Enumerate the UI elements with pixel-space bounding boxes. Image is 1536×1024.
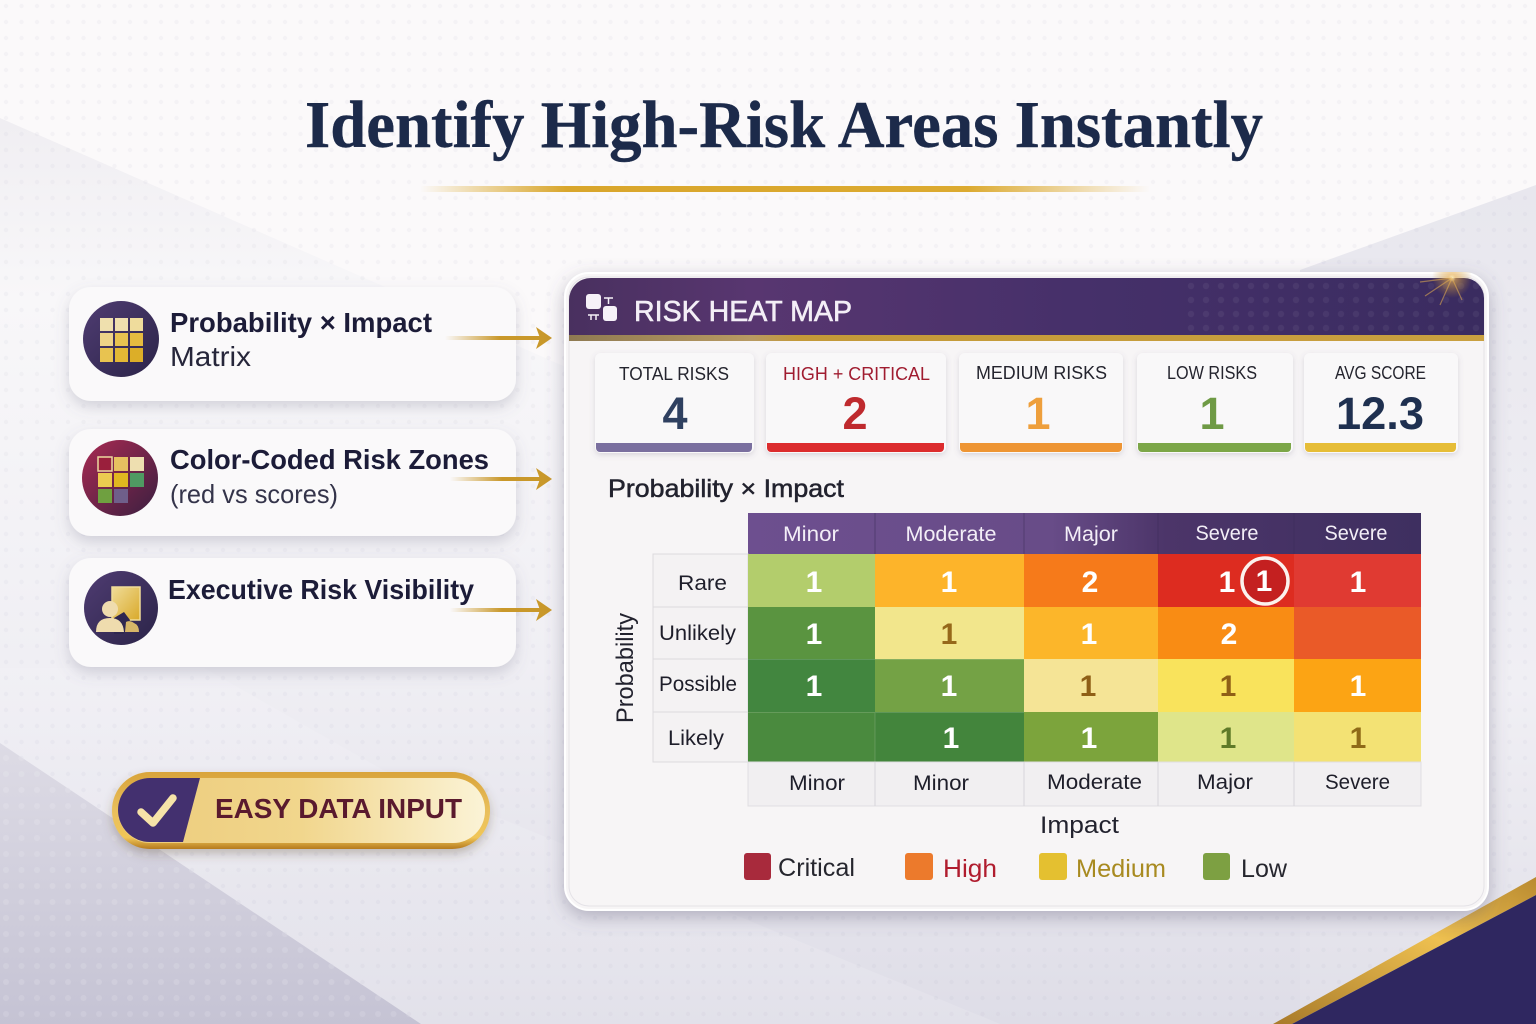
kpi: low risks: LOW RISKS bbox=[1167, 363, 1257, 383]
icon: check mark bbox=[118, 778, 200, 842]
kpi: high and critical: 2 bbox=[842, 388, 868, 439]
kpi: low risks bbox=[1137, 353, 1293, 453]
bottom axis labels: Minor bbox=[789, 772, 845, 795]
heading: executive risk visibility: Executive Risk Visibility bbox=[168, 574, 474, 605]
icon: executive with board bbox=[84, 571, 158, 645]
column headers bbox=[748, 513, 1421, 554]
column headers: Severe bbox=[1196, 522, 1258, 545]
column headers: Moderate bbox=[906, 523, 996, 546]
heat map cells: 1 bbox=[941, 566, 957, 599]
kpi: low risks: 1 bbox=[1199, 388, 1225, 439]
heat map cells: 2 bbox=[1082, 566, 1098, 599]
panel: probability impact matrix bbox=[69, 287, 516, 401]
panel: risk heat map bbox=[565, 258, 1488, 910]
heat map cells: 1 bbox=[1350, 722, 1366, 755]
icon: heat map glyph bbox=[586, 294, 617, 321]
bottom axis labels bbox=[748, 762, 1421, 806]
bottom axis labels: Major bbox=[1197, 771, 1253, 794]
heat map cells: 1 bbox=[1081, 722, 1097, 755]
row labels bbox=[653, 554, 748, 762]
heading: probability impact chart: Probability × Impact bbox=[608, 475, 844, 503]
legend: Critical bbox=[778, 854, 855, 882]
heat map cells: 1 bbox=[806, 670, 822, 703]
heat map cells: 1 bbox=[1219, 566, 1235, 599]
column headers: Severe bbox=[1324, 522, 1388, 545]
bottom axis labels: Minor bbox=[913, 772, 969, 795]
heat map cells: 1 bbox=[1220, 722, 1236, 755]
row labels: Rare bbox=[678, 572, 727, 595]
legend: Medium bbox=[1076, 855, 1166, 883]
kpi: high and critical: HIGH + CRITICAL bbox=[783, 364, 930, 384]
kpi: medium risks bbox=[959, 353, 1123, 453]
panel header bbox=[569, 272, 1484, 341]
axis label: impact: Impact bbox=[1040, 812, 1119, 839]
title: Identify High-Risk Areas Instantly bbox=[305, 88, 1263, 162]
arrow: matrix to heat map bbox=[445, 327, 552, 349]
heat map cells: 1 bbox=[1220, 670, 1236, 703]
heat map cells: 1 bbox=[806, 618, 822, 651]
heat map cells: 1 bbox=[1080, 670, 1096, 703]
arrow: visibility to heat map bbox=[450, 599, 552, 621]
row labels: Possible bbox=[659, 673, 737, 696]
text: easy data input: EASY DATA INPUT bbox=[215, 793, 462, 824]
button: easy data input bbox=[112, 772, 490, 849]
column headers: Major bbox=[1064, 523, 1118, 546]
bottom axis labels: Moderate bbox=[1047, 771, 1142, 794]
kpi: total risks bbox=[595, 353, 754, 453]
panel: executive risk visibility bbox=[69, 558, 516, 667]
heading: risk heat map: RISK HEAT MAP bbox=[634, 296, 852, 328]
heat map cells: 1 bbox=[943, 722, 959, 755]
heading: probability impact: Probability × Impact bbox=[170, 307, 432, 338]
legend bbox=[744, 853, 1288, 883]
kpi: average score: AVG SCORE bbox=[1335, 363, 1426, 383]
kpi: average score bbox=[1304, 353, 1458, 453]
callout: circled risk count: 1 bbox=[1256, 565, 1272, 598]
heading: color-coded risk zones: Color-Coded Risk Zones bbox=[170, 444, 489, 475]
legend: Low bbox=[1241, 855, 1288, 883]
text: red vs scores: (red vs scores) bbox=[170, 479, 338, 509]
kpi: average score: 12.3 bbox=[1336, 388, 1424, 439]
heat map cells: 1 bbox=[1350, 670, 1366, 703]
row labels: Likely bbox=[668, 727, 725, 750]
heat map cells bbox=[748, 554, 1421, 762]
corner accent: navy and gold bbox=[1273, 877, 1536, 1024]
row labels: Unlikely bbox=[659, 622, 737, 645]
chart: heat map matrix bbox=[612, 513, 1421, 839]
title underline bbox=[420, 186, 1150, 192]
kpi: medium risks: 1 bbox=[1025, 388, 1051, 439]
heat map cells: 1 bbox=[1350, 566, 1366, 599]
icon: matrix grid bbox=[83, 301, 159, 377]
bottom axis labels: Severe bbox=[1325, 771, 1390, 794]
column headers: Minor bbox=[783, 523, 839, 546]
kpi: high and critical bbox=[766, 353, 946, 453]
text: matrix: Matrix bbox=[170, 341, 251, 372]
legend: High bbox=[943, 855, 997, 883]
heat map cells: 1 bbox=[941, 670, 957, 703]
callout: circled risk count bbox=[1242, 558, 1288, 604]
heat map cells: 1 bbox=[941, 618, 957, 651]
icon: risk zones grid bbox=[82, 440, 158, 516]
kpi: total risks: 4 bbox=[662, 388, 688, 439]
arrow: zones to heat map bbox=[450, 468, 552, 490]
heat map cells: 1 bbox=[1081, 618, 1097, 651]
heat map cells: 2 bbox=[1221, 618, 1237, 651]
heat map cells: 1 bbox=[806, 566, 822, 599]
panel: color-coded risk zones bbox=[69, 429, 516, 536]
kpi: total risks: TOTAL RISKS bbox=[619, 364, 729, 384]
axis label: probability: Probability bbox=[612, 613, 639, 723]
kpi: medium risks: MEDIUM RISKS bbox=[976, 363, 1107, 383]
